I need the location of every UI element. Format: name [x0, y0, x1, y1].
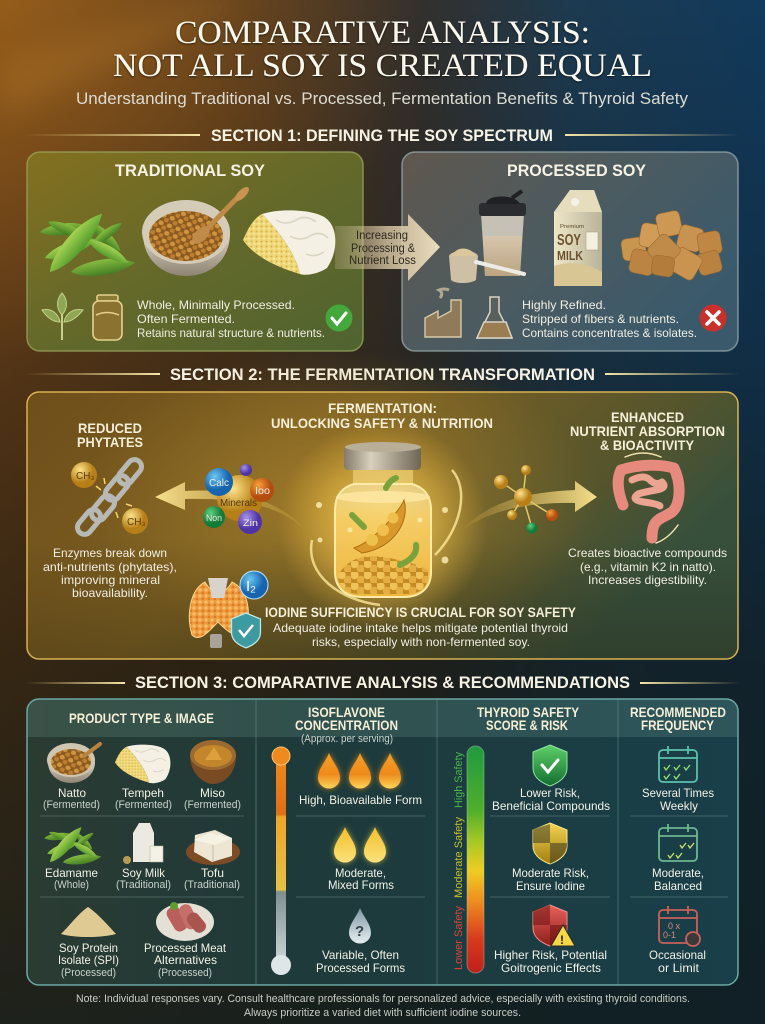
- product: soy protein isolate: [58, 907, 119, 979]
- bioactive description: Creates bioactive compounds: [568, 546, 727, 560]
- occasional frequency row: or Limit: [658, 961, 700, 975]
- thyroid safety bar: [453, 746, 484, 973]
- iodine message: [265, 604, 577, 649]
- lower risk row: Beneficial Compounds: [492, 799, 610, 813]
- product: soy protein isolate: (Processed): [61, 967, 116, 979]
- footnote: [76, 993, 690, 1019]
- processed soy description: Stripped of fibers & nutrients.: [522, 312, 679, 326]
- processed soy description: [522, 298, 697, 340]
- moderate isoflavone row: Mixed Forms: [328, 878, 394, 892]
- product: miso: Miso: [200, 786, 225, 800]
- icon: protein shaker and scoop: [449, 191, 526, 283]
- product: edamame: [44, 823, 102, 891]
- phytates description: Enzymes break down: [53, 546, 167, 560]
- table headers: ISOFLAVONE: [308, 704, 385, 720]
- icon: lab flask: [477, 297, 512, 338]
- variable isoflavone row: [316, 908, 405, 975]
- icon: soy milk carton: [554, 190, 602, 286]
- panel: processed soy: [402, 152, 738, 351]
- product: tempeh: [115, 745, 172, 811]
- footnote: Always prioritize a varied diet with sufficient iodine sources.: [244, 1007, 521, 1019]
- product: edamame: Edamame: [45, 866, 98, 880]
- icon: red cross: [700, 304, 726, 332]
- enhanced absorption heading: NUTRIENT ABSORPTION: [570, 423, 725, 439]
- product: processed meat alternatives: [144, 902, 227, 979]
- moderate frequency row: Moderate,: [652, 866, 704, 880]
- processed soy heading: PROCESSED SOY: [507, 161, 647, 180]
- section 3 heading: SECTION 3: COMPARATIVE ANALYSIS & RECOMMENDATIONS: [135, 673, 630, 692]
- phytates description: [43, 546, 177, 600]
- icon: fermentation jar with soybeans: [278, 420, 488, 630]
- table headers: FREQUENCY: [641, 717, 715, 733]
- moderate risk row: [512, 823, 589, 893]
- table headers: SCORE & RISK: [486, 717, 568, 733]
- minerals cluster: Ioo: [255, 486, 270, 497]
- table headers: RECOMMENDED: [630, 704, 726, 720]
- arrow: increasing processing and nutrient loss: Nutrient Loss: [349, 255, 416, 267]
- fermentation heading: FERMENTATION:: [328, 400, 437, 416]
- title: [113, 15, 652, 84]
- minerals cluster: [203, 464, 274, 534]
- enhanced absorption heading: ENHANCED: [611, 409, 684, 425]
- table headers: [69, 704, 726, 745]
- icon: soy milk carton: SOY: [557, 232, 581, 249]
- traditional soy description: Retains natural structure & nutrients.: [137, 326, 325, 340]
- bioactive description: [568, 546, 727, 587]
- higher risk row: !: [560, 933, 564, 947]
- arrow: toward reduced phytates: [155, 482, 305, 530]
- several times weekly row: Several Times: [642, 786, 714, 800]
- product: soy milk: [116, 823, 171, 891]
- product: tofu: Tofu: [201, 866, 224, 880]
- reduced phytates heading: REDUCED: [78, 420, 142, 436]
- phytates description: improving mineral: [61, 573, 160, 587]
- bioactive description: Increases digestibility.: [588, 573, 707, 587]
- thyroid safety bar: High Safety: [453, 752, 465, 808]
- icon: soy milk carton: MILK: [557, 248, 583, 263]
- bioactive description: (e.g., vitamin K2 in natto).: [580, 560, 716, 574]
- product: tofu: (Traditional): [184, 879, 240, 891]
- reduced phytates heading: PHYTATES: [77, 434, 143, 450]
- traditional soy heading: TRADITIONAL SOY: [115, 161, 266, 180]
- product: soy protein isolate: Soy Protein: [59, 941, 118, 955]
- product: soy milk: (Traditional): [116, 879, 171, 891]
- lower risk row: [492, 745, 610, 813]
- high isoflavone row: [299, 753, 422, 807]
- enhanced absorption heading: [570, 409, 725, 453]
- subtitle: Understanding Traditional vs. Processed, Fermentation Benefits & Thyroid Safety: [76, 89, 688, 108]
- table headers: PRODUCT TYPE & IMAGE: [69, 710, 214, 726]
- thyroid safety bar: Moderate Safety: [453, 817, 465, 898]
- icon: broken chain with CH3: [71, 457, 148, 537]
- icon: factory: [425, 289, 461, 337]
- moderate risk row: Ensure Iodine: [516, 879, 585, 893]
- moderate isoflavone row: Moderate,: [335, 866, 386, 880]
- product: natto: Natto: [58, 786, 86, 800]
- lower risk row: Lower Risk,: [520, 786, 580, 800]
- product: processed meat alternatives: Alternatives: [154, 953, 217, 967]
- title: COMPARATIVE ANALYSIS:: [175, 15, 590, 51]
- arrow: increasing processing and nutrient loss: Processing &: [351, 243, 415, 255]
- icon: broken chain with CH3: CH₃: [127, 517, 146, 528]
- higher risk row: [494, 905, 607, 975]
- occasional frequency row: 0 x: [668, 921, 681, 931]
- panel: fermentation: [27, 350, 738, 659]
- several times weekly row: Weekly: [660, 799, 698, 813]
- higher risk row: Higher Risk, Potential: [494, 948, 607, 962]
- table headers: THYROID SAFETY: [477, 704, 580, 720]
- moderate isoflavone row: [328, 827, 394, 892]
- icon: edamame pods: [39, 207, 136, 280]
- section 2 heading: SECTION 2: THE FERMENTATION TRANSFORMATION: [170, 365, 595, 384]
- product: processed meat alternatives: (Processed): [158, 967, 212, 979]
- variable isoflavone row: Processed Forms: [316, 961, 405, 975]
- icon: leaf sprig: [42, 293, 83, 340]
- arrow: increasing processing and nutrient loss: [335, 214, 440, 281]
- moderate risk row: Moderate Risk,: [512, 866, 589, 880]
- product: edamame: (Whole): [54, 879, 89, 891]
- icon: broken chain with CH3: CH₃: [76, 471, 95, 482]
- product: soy milk: Soy Milk: [122, 866, 166, 880]
- icon: green check: [326, 304, 352, 332]
- processed soy description: Highly Refined.: [522, 298, 606, 312]
- icon: thyroid with iodine and shield: [189, 571, 268, 648]
- panel: traditional soy: [27, 152, 363, 351]
- processed soy description: Contains concentrates & isolates.: [522, 326, 697, 340]
- minerals cluster: Calc: [209, 478, 229, 489]
- icon: fermentation jar: [93, 295, 122, 340]
- thyroid safety bar: Lower Safety: [453, 906, 465, 970]
- iodine message: Adequate iodine intake helps mitigate potential thyroid: [273, 621, 568, 635]
- icon: tempeh block: [243, 210, 335, 275]
- fermentation heading: [271, 400, 493, 431]
- variable isoflavone row: Variable, Often: [322, 948, 399, 962]
- product: tempeh: (Fermented): [115, 799, 172, 811]
- product: processed meat alternatives: Processed Meat: [144, 941, 227, 955]
- table headers: CONCENTRATION: [295, 717, 398, 733]
- reduced phytates heading: [77, 420, 143, 450]
- variable isoflavone row: ?: [355, 923, 364, 940]
- iodine message: IODINE SUFFICIENCY IS CRUCIAL FOR SOY SAFETY: [265, 604, 577, 620]
- product: natto: (Fermented): [43, 799, 100, 811]
- minerals cluster: Zin: [243, 518, 258, 528]
- fermentation heading: UNLOCKING SAFETY & NUTRITION: [271, 415, 493, 431]
- moderate frequency row: [652, 824, 704, 893]
- icon: intestines: [618, 453, 679, 543]
- minerals cluster: Minerals: [220, 498, 257, 509]
- icon: thyroid with iodine and shield: I₂: [246, 578, 256, 595]
- product: miso: [184, 740, 241, 811]
- traditional soy description: Whole, Minimally Processed.: [137, 298, 295, 312]
- product: miso: (Fermented): [184, 799, 241, 811]
- traditional soy description: [137, 298, 325, 340]
- phytates description: anti-nutrients (phytates),: [43, 560, 177, 574]
- icon: textured soy chunks: [620, 210, 723, 282]
- product: tempeh: Tempeh: [122, 786, 164, 800]
- panel: comparison table: [27, 699, 738, 985]
- isoflavone thermometer: [271, 747, 291, 975]
- title: NOT ALL SOY IS CREATED EQUAL: [113, 48, 652, 84]
- product: soy protein isolate: Isolate (SPI): [58, 953, 119, 967]
- phytates description: bioavailability.: [72, 586, 148, 600]
- occasional frequency row: Occasional: [649, 948, 706, 962]
- high isoflavone row: High, Bioavailable Form: [299, 793, 422, 807]
- occasional frequency row: 0-1: [663, 930, 676, 940]
- minerals cluster: Non: [206, 513, 222, 523]
- section 1 heading: SECTION 1: DEFINING THE SOY SPECTRUM: [211, 126, 553, 145]
- several times weekly row: [642, 746, 714, 813]
- occasional frequency row: [649, 906, 706, 975]
- traditional soy description: Often Fermented.: [137, 312, 235, 326]
- enhanced absorption heading: & BIOACTIVITY: [600, 437, 695, 453]
- icon: soy milk carton: Premium: [560, 224, 584, 230]
- arrow and bioactive molecule: [462, 465, 597, 534]
- moderate frequency row: Balanced: [654, 879, 702, 893]
- footnote: Note: Individual responses vary. Consult healthcare professionals for personalized advice, especially with existing thyroid conditions.: [76, 993, 690, 1005]
- icon: natto bowl: [142, 185, 251, 276]
- product: natto: [43, 743, 100, 811]
- iodine message: risks, especially with non-fermented soy.: [312, 635, 530, 649]
- product: tofu: [184, 830, 240, 891]
- table headers: (Approx. per serving): [301, 733, 393, 745]
- higher risk row: Goitrogenic Effects: [501, 961, 601, 975]
- arrow: increasing processing and nutrient loss: Increasing: [356, 230, 408, 242]
